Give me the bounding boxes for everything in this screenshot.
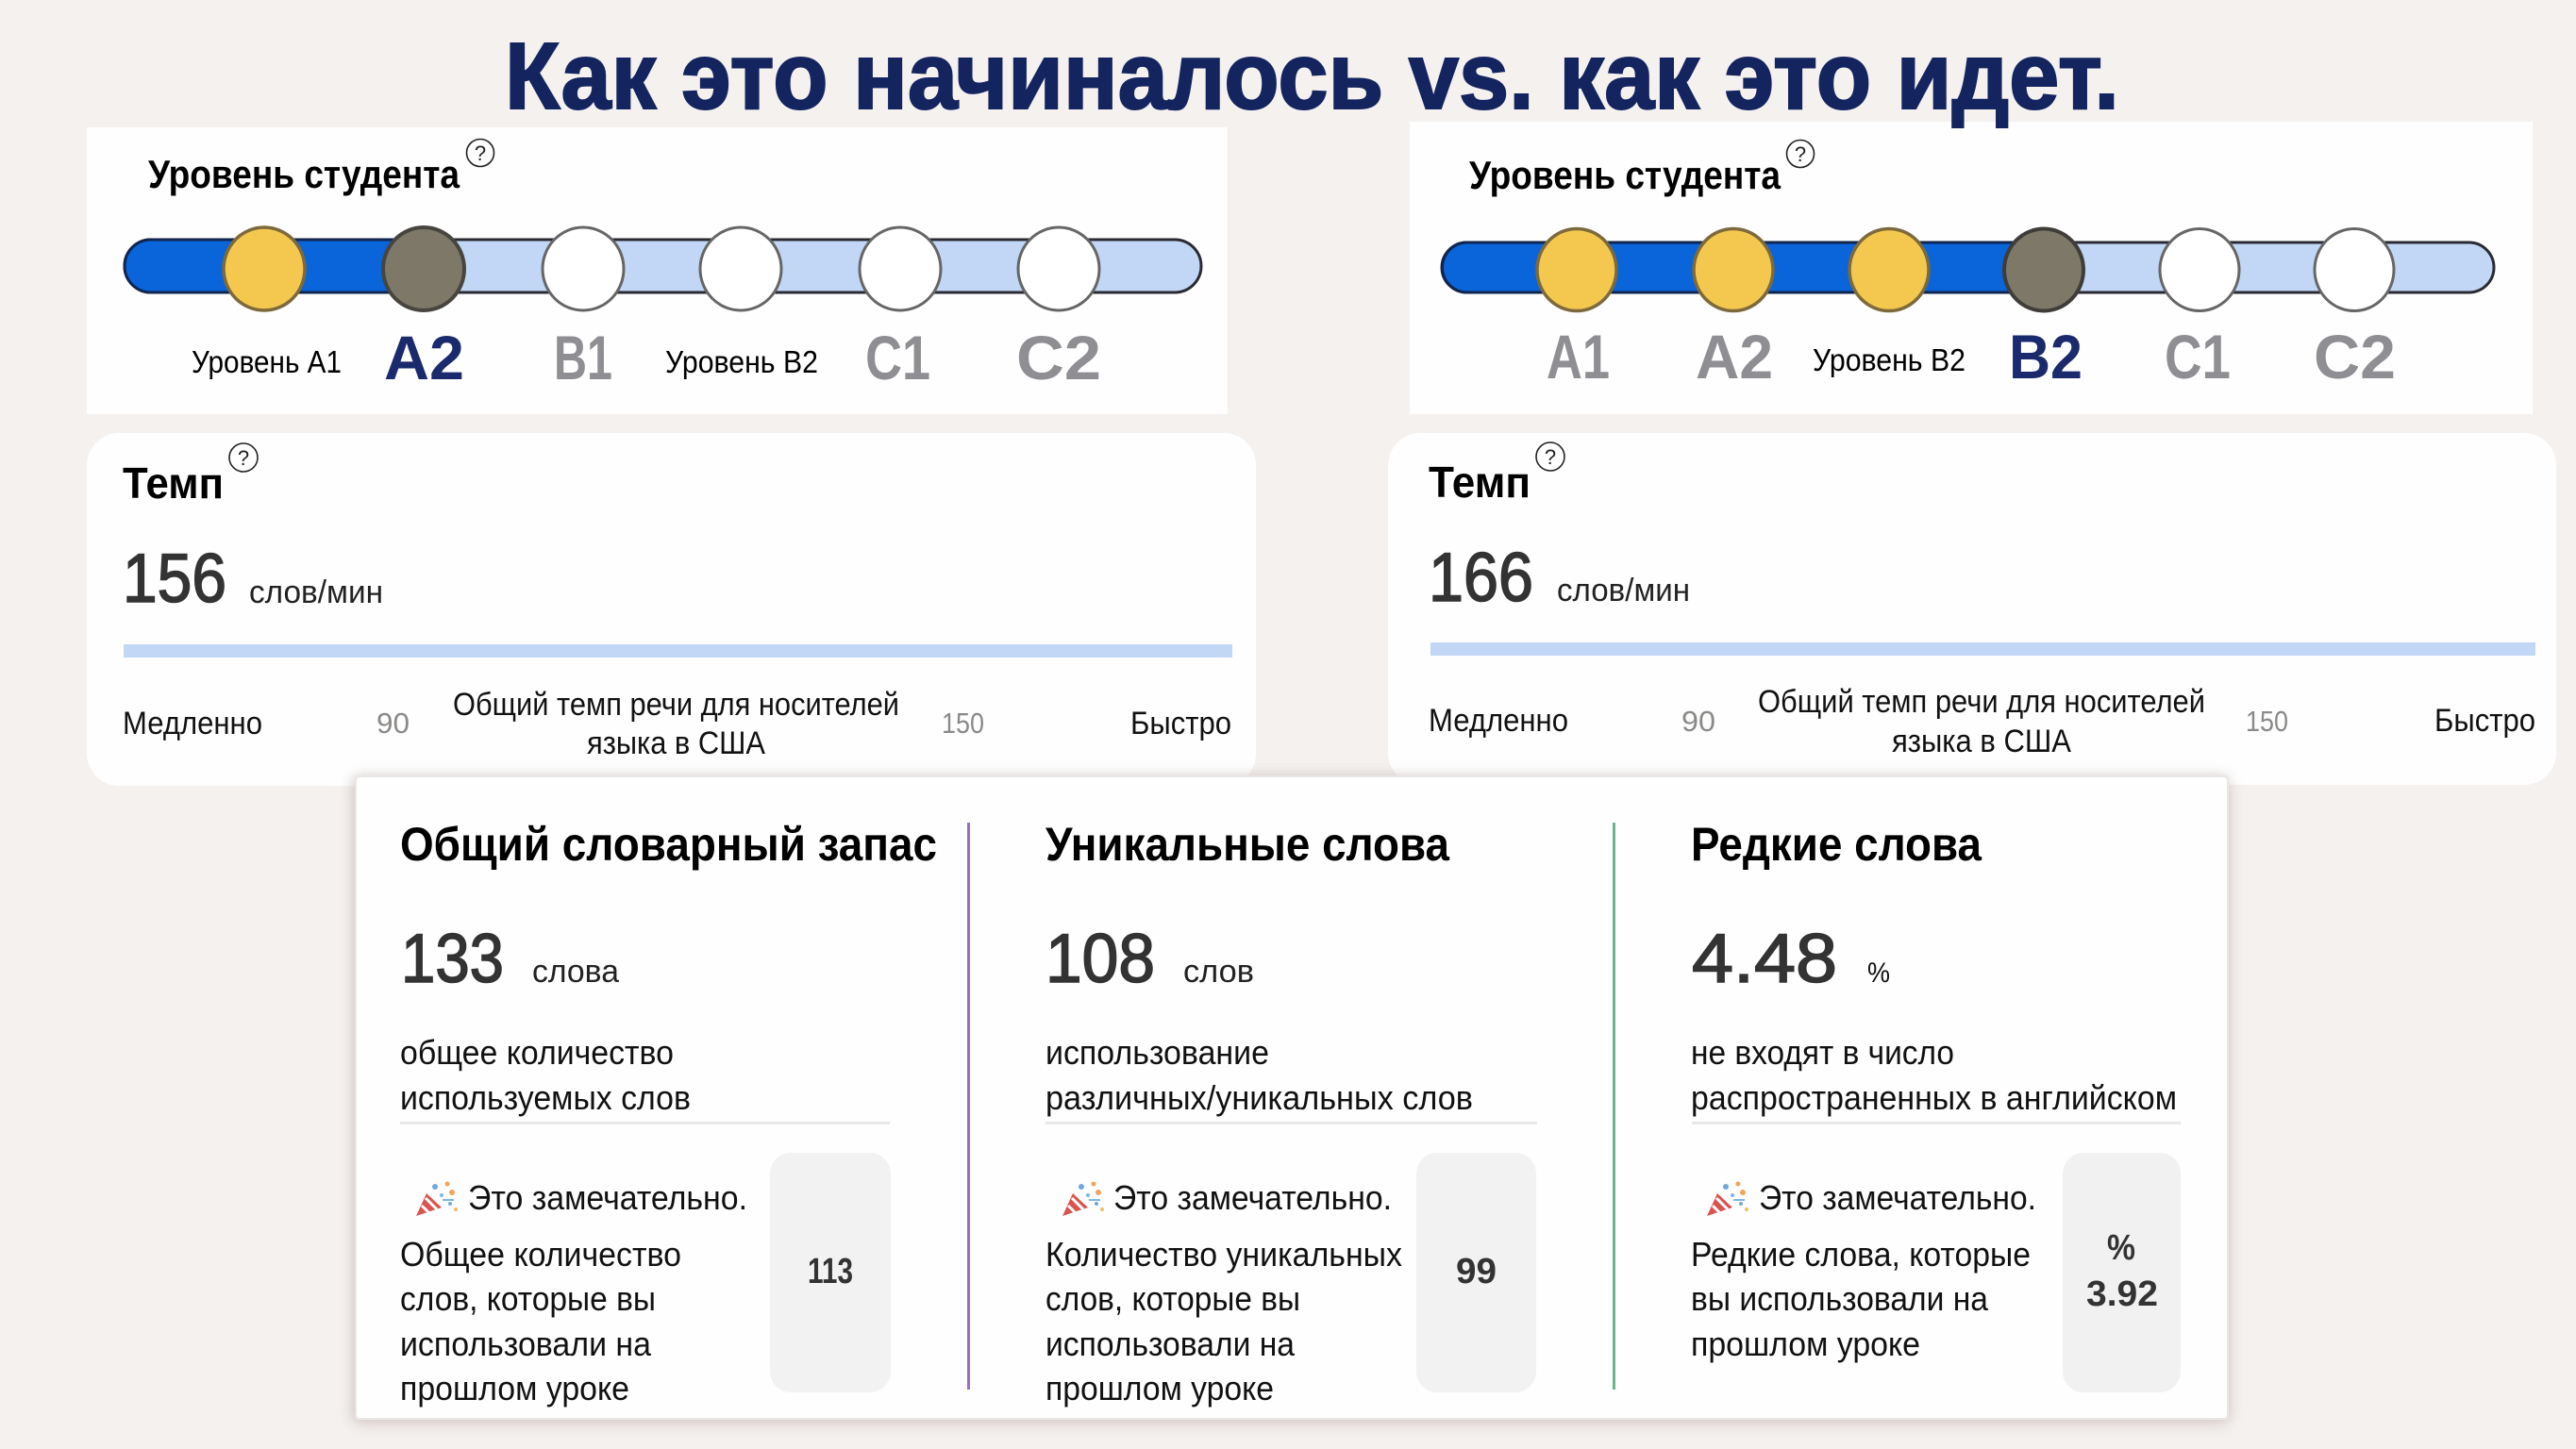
pace scale before: Быстро <box>1130 706 1231 741</box>
pace bar before <box>124 644 1232 658</box>
icon: help pace before <box>229 443 258 472</box>
column: unique words <box>1045 818 1537 1407</box>
level labels before: B1 <box>554 323 612 392</box>
pace scale before: 90 <box>376 707 410 740</box>
level labels before: C2 <box>1016 323 1101 392</box>
description: rare words <box>1691 1033 2177 1117</box>
pace value now: 166 <box>1429 540 1533 616</box>
panel: pace before <box>87 433 1256 786</box>
icon: help now level <box>1787 140 1814 168</box>
value: 133 words: 133 <box>401 921 504 997</box>
callout: unique words <box>1045 1178 1402 1407</box>
pace bar now <box>1430 642 2535 656</box>
callout: total vocabulary: Общее количество <box>400 1235 681 1274</box>
pace scale now: 90 <box>1681 705 1715 738</box>
level labels before: Уровень B2 <box>665 344 818 379</box>
previous value box: 3.92 percent: 3.92 <box>2086 1274 2158 1314</box>
pace scale now: 150 <box>2246 705 2288 738</box>
icon: party popper 2 <box>1062 1181 1104 1216</box>
pace scale now: Медленно <box>1429 703 1568 739</box>
icon: help now level: ? <box>1795 142 1806 166</box>
level labels now: A2 <box>1696 322 1773 391</box>
heading: rare words: Редкие слова <box>1691 818 1982 871</box>
value: 4.48 percent: 4.48 <box>1692 921 1837 997</box>
pace scale now: Быстро <box>2434 703 2535 739</box>
panel: vocabulary metrics <box>355 775 2229 1420</box>
description: total vocabulary: используемых слов <box>400 1078 691 1117</box>
value: 4.48 percent: % <box>1867 958 1890 989</box>
callout: unique words: слов, которые вы <box>1045 1279 1300 1318</box>
pace scale now: языка в США <box>1892 724 2071 759</box>
previous value box: 3.92 percent <box>2063 1153 2181 1392</box>
pace scale before: Общий темп речи для носителей <box>453 687 899 723</box>
description: unique words: использование <box>1045 1033 1269 1072</box>
level labels before: Уровень A1 <box>192 344 342 379</box>
description: unique words <box>1045 1033 1473 1117</box>
previous value box: 99: 99 <box>1456 1252 1497 1291</box>
pace scale before: 150 <box>942 707 984 740</box>
callout: total vocabulary: Это замечательно. <box>468 1178 747 1217</box>
value: 4.48 percent <box>1692 921 1890 997</box>
pace value before <box>123 541 383 617</box>
previous value box: 113: 113 <box>808 1252 853 1291</box>
panel: pace now <box>1388 433 2556 785</box>
callout: total vocabulary: прошлом уроке <box>400 1369 629 1407</box>
heading: student level before: Уровень студента <box>148 152 460 196</box>
callout: unique words: прошлом уроке <box>1045 1369 1274 1407</box>
title: Как это начиналось vs. как это идет. <box>505 24 2119 129</box>
icon: help before level <box>466 140 494 166</box>
level track before <box>125 227 1201 310</box>
pace value now: слов/мин <box>1557 573 1690 608</box>
panel: student level before <box>87 127 1228 414</box>
level labels before <box>192 323 1101 392</box>
level labels before: A2 <box>384 323 464 392</box>
icon: party popper 1 <box>416 1181 458 1216</box>
pace scale before: языка в США <box>587 725 765 761</box>
panel: student level now <box>1410 122 2533 414</box>
previous value box: 99 <box>1416 1153 1536 1392</box>
callout: unique words: Количество уникальных <box>1045 1235 1402 1274</box>
level labels now: A1 <box>1547 322 1610 391</box>
callout: rare words: прошлом уроке <box>1691 1324 1920 1363</box>
column: rare words <box>1691 818 2181 1392</box>
heading: pace before: Темп <box>123 458 224 508</box>
callout: unique words: использовали на <box>1045 1324 1296 1363</box>
description: unique words: различных/уникальных слов <box>1045 1078 1473 1117</box>
callout: rare words: Это замечательно. <box>1759 1178 2036 1217</box>
icon: help pace now: ? <box>1545 445 1556 469</box>
icon: help pace now <box>1536 442 1564 471</box>
value: 108 words: слов <box>1183 954 1254 990</box>
heading: total vocabulary: Общий словарный запас <box>400 818 937 871</box>
level track now <box>1442 228 2494 311</box>
pace scale before <box>123 687 1231 761</box>
level labels now: Уровень B2 <box>1813 342 1965 377</box>
callout: total vocabulary: слов, которые вы <box>400 1279 656 1318</box>
callout: total vocabulary <box>400 1178 747 1407</box>
callout: rare words: Редкие слова, которые <box>1691 1235 2031 1274</box>
callout: total vocabulary: использовали на <box>400 1324 652 1363</box>
value: 108 words <box>1045 921 1254 997</box>
level labels now <box>1547 322 2396 391</box>
callout: unique words: Это замечательно. <box>1113 1178 1392 1217</box>
heading: pace now: Темп <box>1429 458 1531 507</box>
value: 133 words: слова <box>532 954 619 990</box>
level labels before: C1 <box>865 323 930 392</box>
icon: party popper 3 <box>1707 1181 1748 1216</box>
description: rare words: распространенных в английском <box>1691 1078 2177 1117</box>
icon: help pace before: ? <box>238 446 249 470</box>
pace scale now: Общий темп речи для носителей <box>1758 684 2205 720</box>
pace value now <box>1429 540 1690 616</box>
level labels now: B2 <box>2009 322 2083 391</box>
heading: student level now: Уровень студента <box>1469 153 1781 197</box>
callout: rare words: вы использовали на <box>1691 1279 1989 1318</box>
description: total vocabulary <box>400 1033 691 1117</box>
level labels now: C1 <box>2165 322 2231 391</box>
previous value box: 3.92 percent: % <box>2107 1228 2135 1268</box>
pace value before: 156 <box>123 541 226 617</box>
icon: help before level: ? <box>475 142 486 165</box>
value: 133 words <box>401 921 619 997</box>
column: total vocabulary <box>400 818 937 1407</box>
pace value before: слов/мин <box>249 575 383 610</box>
description: total vocabulary: общее количество <box>400 1033 674 1072</box>
callout: rare words <box>1691 1178 2036 1363</box>
heading: unique words: Уникальные слова <box>1045 818 1450 871</box>
pace scale before: Медленно <box>123 706 262 741</box>
level labels now: C2 <box>2314 322 2396 391</box>
description: rare words: не входят в число <box>1691 1033 1954 1072</box>
pace scale now <box>1429 684 2535 759</box>
previous value box: 113 <box>770 1153 891 1392</box>
value: 108 words: 108 <box>1045 921 1155 997</box>
